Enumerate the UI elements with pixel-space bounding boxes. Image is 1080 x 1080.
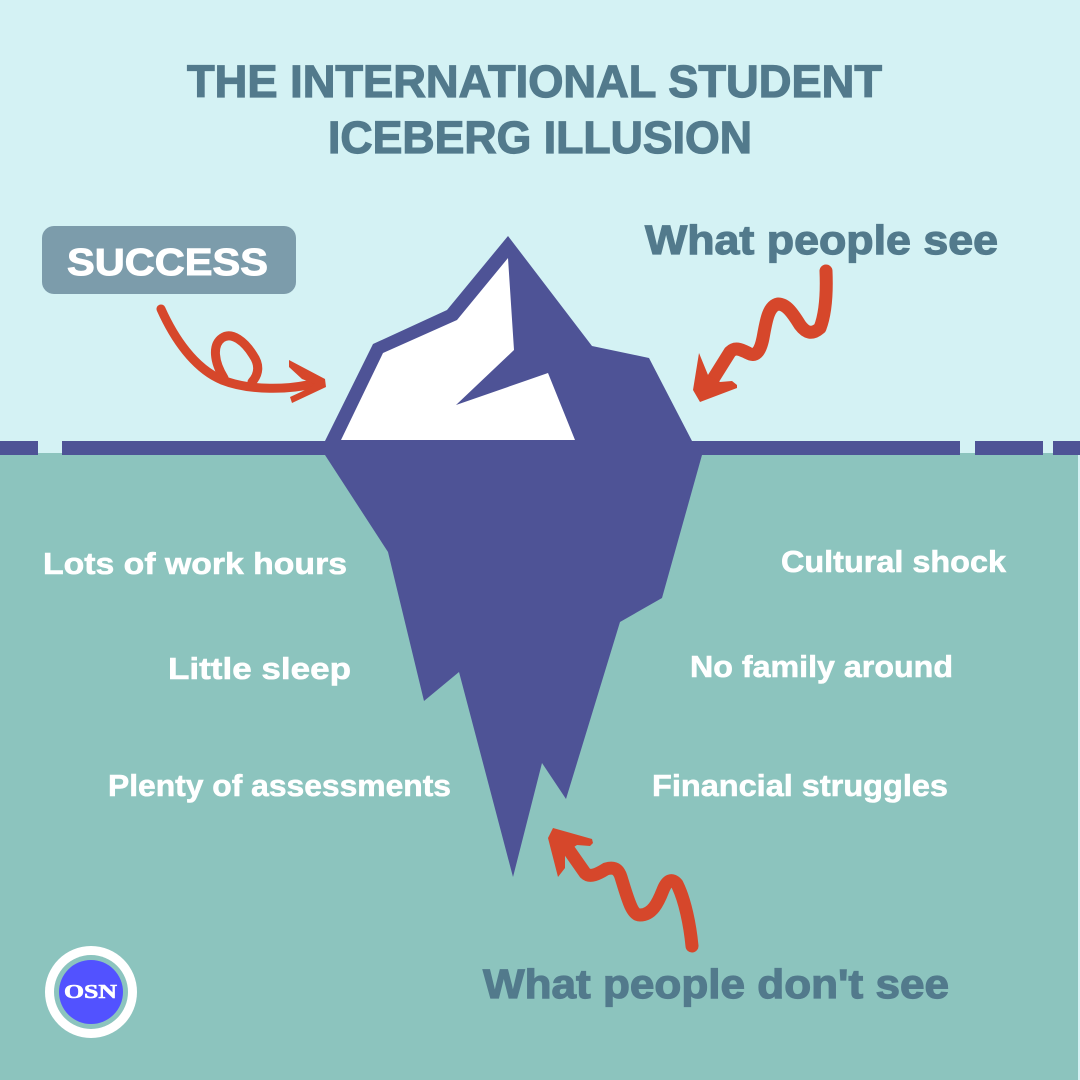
iceberg: below water [325,455,702,877]
iceberg: above water [325,236,702,455]
iceberg: white highlight [341,258,575,440]
text block: right hidden items: Financial struggles [652,768,948,803]
text block: right hidden items: No family around [690,649,953,684]
arrow: what people don't see [548,828,692,946]
text block: left hidden items: Lots of work hours [43,546,347,581]
panel: water [0,453,1078,1080]
success label [42,226,296,294]
logo: OSN [45,946,137,1038]
waterline [0,441,1080,455]
text block: right hidden items: Cultural shock [781,544,1007,579]
arrow: what people see [693,271,826,402]
arrow: success to iceberg [161,309,326,403]
label: what people don't see: What people don't see [483,961,949,1007]
label: what people see: What people see [645,217,998,263]
text block: left hidden items: Little sleep [168,651,351,686]
text block: left hidden items [43,546,451,803]
iceberg [325,236,702,877]
title: THE INTERNATIONAL STUDENT [187,56,882,107]
title: ICEBERG ILLUSION [328,112,752,163]
text block: left hidden items: Plenty of assessments [108,768,451,803]
text block: right hidden items [652,544,1007,803]
success label: SUCCESS [67,242,268,284]
title [187,56,882,163]
logo: OSN: OSN [64,981,118,1003]
